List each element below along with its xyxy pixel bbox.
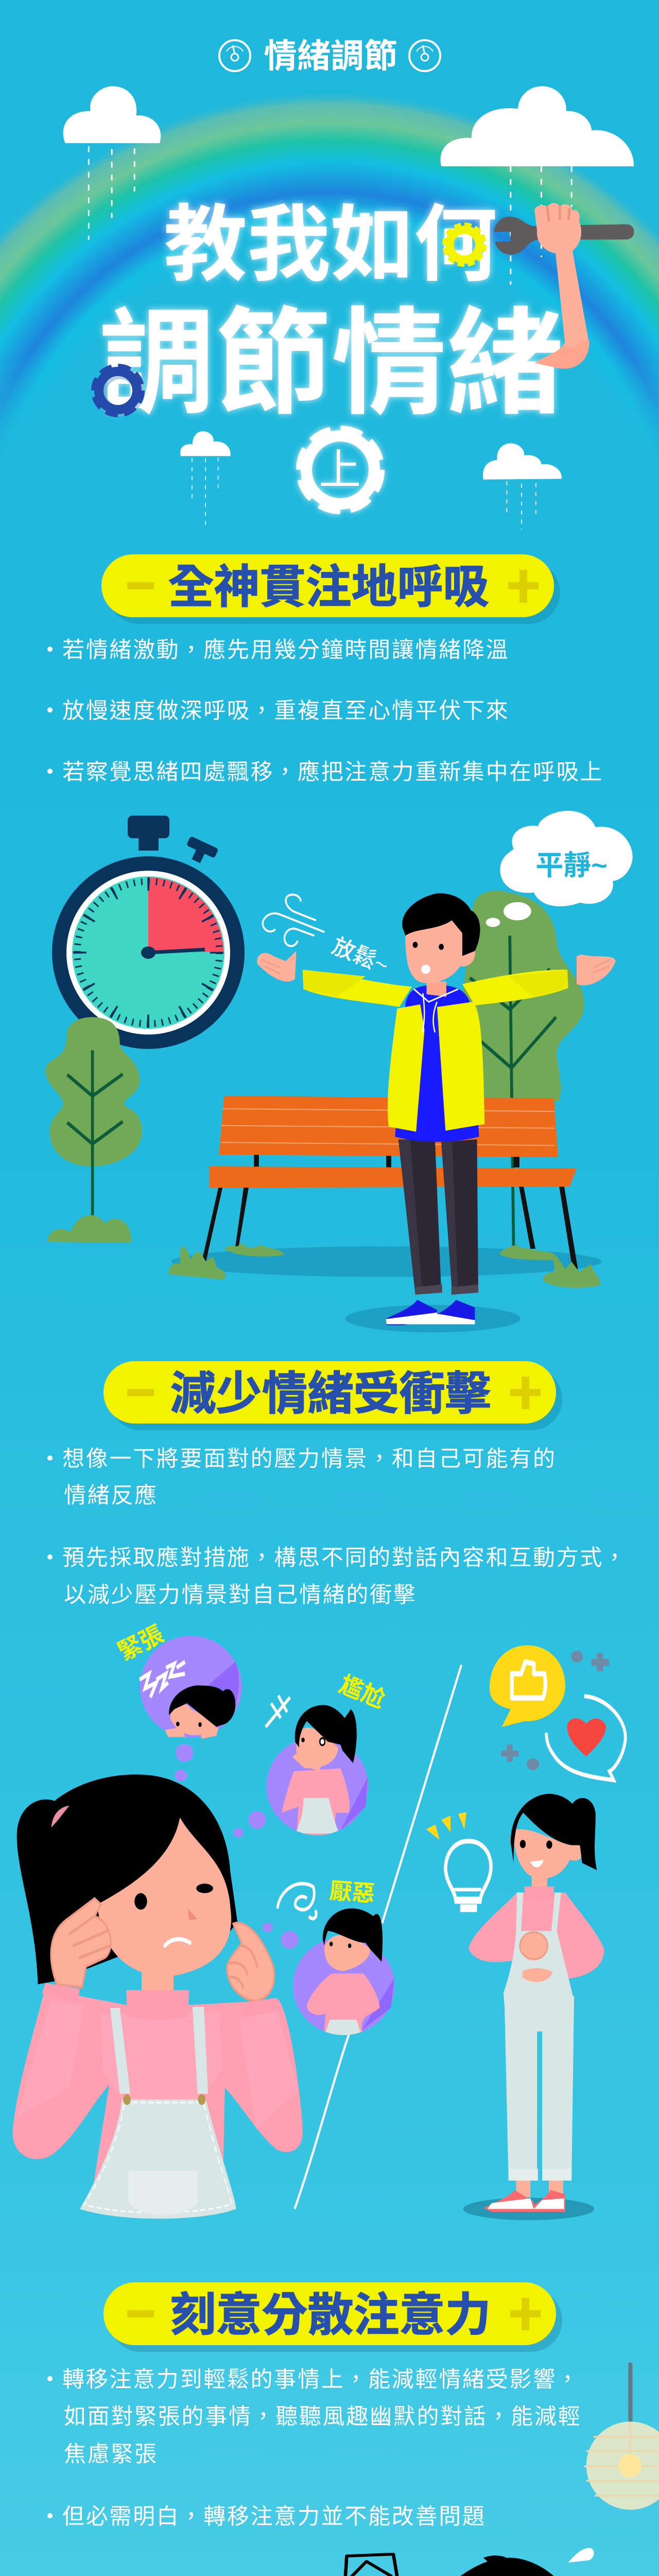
emotion label: embarrassed: 尷尬 xyxy=(335,1671,389,1713)
rainbow xyxy=(0,95,659,433)
bullet list xyxy=(47,638,603,785)
bullet list: 放慢速度做深呼吸，重複直至心情平伏下來 xyxy=(62,699,509,723)
icon: blue gear xyxy=(94,367,142,414)
icon: white gear with 上 xyxy=(300,430,380,510)
shadow under bench xyxy=(171,1246,602,1277)
heading pill: 全神貫注地呼吸 xyxy=(168,561,489,613)
thinking boy head xyxy=(371,2555,610,2576)
wind lines xyxy=(263,894,324,946)
panel: section 3 xyxy=(0,2282,659,2576)
icon: heart bubble xyxy=(546,1696,626,1780)
panel: section 1 xyxy=(45,554,633,1332)
heading pill: 刻意分散注意力 xyxy=(170,2289,491,2341)
bubble: embarrassed xyxy=(266,1696,368,1842)
speech label: relax: 放鬆~ xyxy=(328,933,392,978)
bullet list: 若察覺思緒四處飄移，應把注意力重新集中在呼吸上 xyxy=(62,760,603,785)
icon: white gear with 上: 上 xyxy=(319,447,361,494)
right tree xyxy=(462,890,584,1246)
bullet list: 若情緒激動，應先用幾分鐘時間讓情緒降溫 xyxy=(62,638,509,663)
lamp xyxy=(584,2363,659,2510)
category label: 情緒調節 xyxy=(264,37,397,75)
bullet list: 以減少壓力情景對自己情緒的衝擊 xyxy=(64,1583,417,1607)
bullet list: 預先採取應對措施，構思不同的對話內容和互動方式， xyxy=(62,1546,627,1570)
title: 教我如何 xyxy=(164,198,497,292)
bullet list xyxy=(47,2367,581,2529)
icon: stopwatch xyxy=(52,816,245,1049)
heading pill: 減少情緒受衝擊 xyxy=(170,1368,491,1419)
speech label: calm: 平靜~ xyxy=(535,850,608,881)
bullet list: 想像一下將要面對的壓力情景，和自己可能有的 xyxy=(62,1447,557,1471)
bubble: nervous xyxy=(140,1636,241,1739)
title: 調節情緒 xyxy=(99,299,563,429)
bubble: disgusted xyxy=(278,1884,395,2038)
bullet list: 但必需明白，轉移注意力並不能改善問題 xyxy=(62,2504,486,2529)
man xyxy=(257,893,616,1332)
icon: yellow gear xyxy=(445,225,484,264)
category label xyxy=(219,37,440,75)
standing girl xyxy=(463,1794,604,2220)
heading pill xyxy=(103,2282,562,2352)
bullet list: 如面對緊張的事情，聽聽風趣幽默的對話，能減輕 xyxy=(64,2404,581,2429)
heading pill xyxy=(101,554,560,624)
scribble xyxy=(333,2554,422,2576)
panel: section 2 xyxy=(12,1361,627,2220)
bullet list: 焦慮緊張 xyxy=(64,2442,158,2467)
panel: header xyxy=(63,37,634,530)
thought bubbles xyxy=(486,811,633,927)
divider chalk line xyxy=(295,1666,461,2208)
bullet list: 情緒反應 xyxy=(64,1483,158,1508)
bench xyxy=(202,1096,578,1269)
icon: light bulb xyxy=(426,1812,491,1912)
icon: wrench and arm xyxy=(494,203,634,369)
sweat drops xyxy=(568,2548,604,2576)
big girl xyxy=(12,1774,303,2219)
thought dots xyxy=(175,1744,299,1948)
icon: thumbs up bubble xyxy=(490,1646,565,1727)
bullet list xyxy=(47,1447,627,1607)
title xyxy=(99,198,563,429)
clouds with rain xyxy=(63,86,634,530)
bullet list: 轉移注意力到輕鬆的事情上，能減輕情緒受影響， xyxy=(62,2367,580,2392)
heading pill xyxy=(103,1361,562,1430)
emotion label: disgust: 厭惡 xyxy=(328,1878,375,1907)
decorative dots xyxy=(501,1651,609,1770)
illustration: park and man xyxy=(45,811,633,1332)
bushes xyxy=(169,1243,600,1287)
left tree xyxy=(45,1017,142,1243)
emotion label: nervous: 緊張 xyxy=(114,1620,168,1666)
